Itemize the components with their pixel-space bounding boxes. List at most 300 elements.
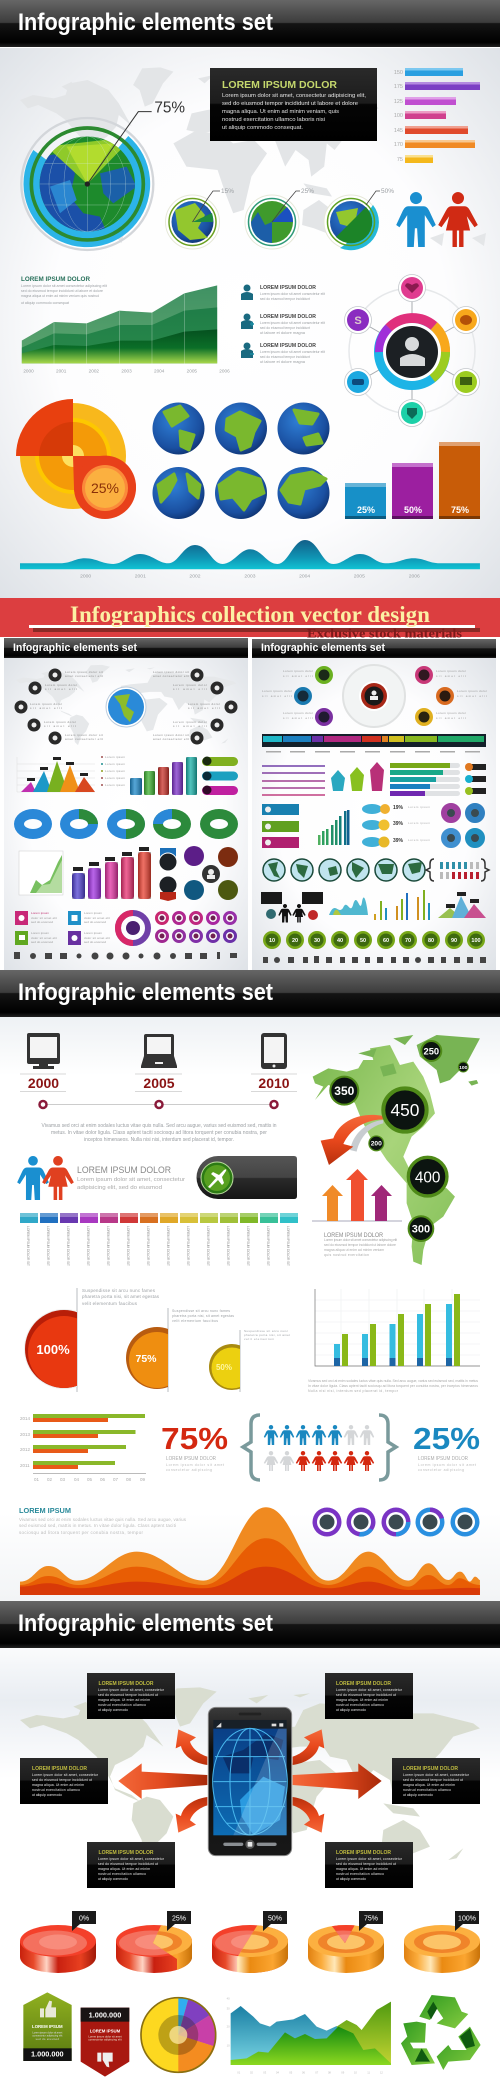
triangle chart bbox=[17, 755, 126, 792]
section 2 right mini panel bbox=[252, 639, 496, 970]
orange area chart bbox=[20, 1507, 480, 1595]
people icons bbox=[396, 192, 486, 247]
info box top left: sed do eiusmod tempor incididunt ut bbox=[98, 1693, 158, 1697]
icon text list: Lorem ipsum dolor sit amet consectetur elit bbox=[260, 321, 325, 325]
info box top left: Lorem ipsum dolor sit amet, consectetur bbox=[98, 1688, 165, 1692]
map text block bbox=[324, 1233, 397, 1257]
cylinders chart bbox=[72, 847, 151, 899]
info box middle left: LOREM IPSUM DOLOR bbox=[32, 1766, 87, 1772]
mini world map with globe bbox=[14, 665, 238, 745]
colour strip with vertical labels: LOREM IPSUM DOLOR SIT bbox=[86, 1226, 90, 1267]
horizontal green orange chart: 2012 bbox=[20, 1447, 31, 1452]
info box middle left: magna aliqua. Ut enim ad minim bbox=[32, 1783, 84, 1787]
six arrows bbox=[118, 1729, 382, 1833]
black text box: magna aliqua. Ut enim ad minim veniam, quis bbox=[222, 109, 339, 115]
icon tile list: sed do eiusmod bbox=[31, 920, 53, 924]
green number badges: 50 bbox=[360, 938, 366, 944]
green Americas map with values: 400 bbox=[415, 1169, 440, 1186]
info box top right bbox=[325, 1673, 413, 1719]
info box middle left: Lorem ipsum dolor sit amet, consectetur bbox=[32, 1773, 99, 1777]
percentage bar columns: 50% bbox=[404, 505, 422, 515]
mini world map with globe: Lorem ipsum dolor bbox=[30, 702, 62, 706]
info box bottom left: Lorem ipsum dolor sit amet, consectetur bbox=[98, 1857, 165, 1861]
info box top left: magna aliqua. Ut enim ad minim bbox=[98, 1698, 150, 1702]
black text box: nostrud exercitation ullamco laboris nisi bbox=[222, 117, 325, 123]
mini world map with globe: Lorem ipsum dolor sit bbox=[65, 670, 103, 674]
timeline paragraph bbox=[42, 1123, 277, 1143]
half circle 50%: 50% bbox=[216, 1363, 232, 1372]
orange radial pie 25% bbox=[16, 399, 136, 519]
green Americas map with values bbox=[313, 1035, 480, 1265]
green Americas map with values: 200 bbox=[371, 1141, 382, 1148]
colour strip with vertical labels: LOREM IPSUM DOLOR SIT bbox=[106, 1226, 110, 1267]
house arrows bbox=[331, 762, 384, 791]
half circle 75%: 75% bbox=[135, 1353, 157, 1365]
ellipse stats: Lorem ipsum bbox=[408, 821, 430, 825]
braces with figure rows bbox=[243, 1415, 396, 1480]
horizontal green orange chart: 2013 bbox=[20, 1432, 31, 1437]
teal wave timeline: 2006 bbox=[409, 574, 420, 580]
half circle 75% bbox=[126, 1308, 234, 1392]
teal wave timeline: 2000 bbox=[80, 574, 91, 580]
thin gradient lines bbox=[262, 766, 325, 795]
ellipse stats: 39% bbox=[393, 838, 404, 844]
section 3 header bar bbox=[0, 970, 500, 1017]
mini world map with globe: sit amet elit bbox=[30, 706, 62, 710]
multicolor radial pie bbox=[141, 1998, 217, 2072]
hub diagram: Lorem ipsum dolor bbox=[457, 689, 487, 693]
lorem block: adipisicing elit, sed do eiusmod bbox=[77, 1185, 162, 1191]
hub diagram: sit amet elit bbox=[262, 694, 292, 698]
half circle 100%: pharetra porta nisi, sit amet egestas bbox=[82, 1294, 160, 1299]
teal wave timeline bbox=[20, 540, 480, 580]
section 1 panel background bbox=[0, 48, 500, 598]
icon strip right bbox=[263, 956, 486, 963]
lorem block: LOREM IPSUM DOLOR bbox=[77, 1165, 171, 1176]
mini world map with globe: amet consectetur elit bbox=[65, 674, 103, 678]
icon tile list: Lorem ipsum bbox=[31, 911, 50, 915]
world map backdrop bbox=[20, 67, 379, 243]
icon text list: Lorem ipsum dolor sit amet consectetur elit bbox=[260, 350, 325, 354]
colour strip with vertical labels: LOREM IPSUM DOLOR SIT bbox=[126, 1226, 130, 1267]
blue green area chart: 11 bbox=[367, 2070, 371, 2074]
blue green area chart: 12 bbox=[380, 2070, 383, 2074]
half circle 50%: velit elementum bbox=[244, 1337, 274, 1341]
hub diagram: Lorem ipsum dolor bbox=[436, 669, 466, 673]
coin 0% bbox=[20, 1911, 96, 1973]
half circle 75%: Suspendisse sit arcu nunc fames bbox=[172, 1309, 230, 1313]
half circle 50%: Suspendisse sit arcu nunc bbox=[244, 1329, 288, 1333]
blue green area chart: 06 bbox=[302, 2070, 305, 2074]
icon text list: LOREM IPSUM DOLOR bbox=[260, 343, 316, 349]
icon tile list: sed do eiusmod bbox=[84, 940, 106, 944]
icon text list: LOREM IPSUM DOLOR bbox=[260, 314, 316, 320]
left mini header: Infographic elements set bbox=[13, 642, 137, 654]
chart heading and text: Lorem ipsum dolor sit amet consectetur adipiscing elit bbox=[21, 284, 107, 288]
coin 50%: 50% bbox=[268, 1916, 282, 1922]
info box top left bbox=[87, 1673, 175, 1719]
lorem block: Lorem ipsum dolor sit amet, consectetur bbox=[77, 1177, 185, 1183]
timeline paragraph: metus. In vitae dolor ligula. Class aptent taciti sociosqu ad litora torquent per conubia nostra, per bbox=[51, 1130, 267, 1136]
green number badges: 40 bbox=[337, 938, 343, 944]
mini world map with globe: sit amet elit bbox=[188, 706, 220, 710]
world map bbox=[20, 1687, 480, 1863]
horizontal colour bar chart: 175 bbox=[394, 84, 403, 90]
colour strip with vertical labels: LOREM IPSUM DOLOR SIT bbox=[286, 1226, 290, 1267]
hub diagram bbox=[262, 665, 487, 727]
3D column bars and pills bbox=[130, 756, 238, 795]
chart heading and text: LOREM IPSUM DOLOR bbox=[21, 276, 90, 283]
small globe 50%: 50% bbox=[381, 188, 394, 195]
half circle 75%: pharetra porta nisi, sit amet egestas bbox=[172, 1314, 234, 1318]
teal wave timeline: 2001 bbox=[135, 574, 146, 580]
thumb badges and bubbles bbox=[159, 846, 238, 901]
25% stat: LOREM IPSUM DOLOR bbox=[418, 1456, 468, 1462]
stacked colour bar bbox=[262, 734, 486, 752]
green area chart: 2000 bbox=[23, 368, 34, 373]
green area chart: 2004 bbox=[154, 368, 165, 373]
icon tile list: sed do eiusmod bbox=[84, 920, 106, 924]
small globe 15%: 15% bbox=[221, 188, 234, 195]
horizontal colour bar chart: 125 bbox=[394, 99, 403, 105]
section 1 header bar: Infographic elements set bbox=[18, 9, 273, 36]
icon tile list: dolor sit amet elit bbox=[84, 936, 110, 940]
info box top right: nostrud exercitation ullamco bbox=[336, 1703, 384, 1707]
black text box: sed do eiusmod tempor incididunt ut labore et dolore bbox=[222, 101, 358, 107]
black text box: Lorem ipsum dolor sit amet, consectetur adipisicing elit, bbox=[222, 93, 366, 99]
half circle 50%: pharetra porta nisi, sit amet bbox=[244, 1333, 290, 1337]
coin 25% bbox=[116, 1911, 192, 1973]
mini world map with globe: amet consectetur elit bbox=[65, 737, 103, 741]
red thumbs down badge: consectetur adipiscing elit bbox=[88, 2038, 122, 2042]
large radar globe 75% bbox=[21, 100, 185, 250]
mini world map with globe: Lorem ipsum dolor sit bbox=[65, 733, 103, 737]
blue green area chart: 20 bbox=[227, 2025, 230, 2029]
black text box: LOREM IPSUM DOLOR bbox=[222, 79, 337, 91]
three banners bbox=[262, 804, 299, 848]
device timeline: 2000 bbox=[28, 1075, 59, 1091]
green Americas map with values: 100 bbox=[459, 1065, 468, 1071]
info box middle right: LOREM IPSUM DOLOR bbox=[403, 1766, 458, 1772]
info box middle right bbox=[392, 1758, 480, 1804]
coin 75%: 75% bbox=[364, 1916, 378, 1922]
icon text list: LOREM IPSUM DOLOR bbox=[260, 285, 316, 291]
section 4: phone diagram bbox=[0, 1601, 500, 2084]
map text block: Lorem ipsum dolor sit amet consectetur adipiscing elit bbox=[324, 1238, 397, 1242]
colour strip with vertical labels bbox=[20, 1213, 298, 1267]
small globe 50% bbox=[324, 188, 394, 250]
progress rings row bbox=[312, 1507, 480, 1537]
timeline paragraph: inceptos himenaeos. Nulla nisi nisi, interdum sed placerat id, tempor. bbox=[84, 1137, 234, 1143]
colour strip with vertical labels: LOREM IPSUM DOLOR SIT bbox=[226, 1226, 230, 1267]
chart heading and text bbox=[21, 276, 107, 305]
icon tile list: Lorem ipsum bbox=[31, 931, 50, 935]
icon text list: Lorem ipsum dolor sit amet consectetur elit bbox=[260, 292, 325, 296]
mini world map with globe: sit amet elit bbox=[45, 687, 77, 691]
teal wave timeline: 2003 bbox=[244, 574, 256, 580]
couple icon bbox=[17, 1156, 74, 1200]
blue green area chart: 02 bbox=[250, 2070, 253, 2074]
section 2: red banner bbox=[0, 598, 500, 637]
teal wave timeline: 2002 bbox=[189, 574, 201, 580]
mini world map with globe: Lorem ipsum dolor sit bbox=[153, 733, 189, 737]
left mini header bbox=[4, 638, 248, 658]
info box middle left bbox=[20, 1758, 108, 1804]
25% stat: Lorem ipsum dolor sit amet bbox=[418, 1463, 476, 1467]
horizontal green orange chart: 09 bbox=[140, 1477, 146, 1482]
green number badges: 10 bbox=[269, 938, 275, 944]
triangle chart: Lorem ipsum bbox=[105, 783, 126, 787]
colour strip with vertical labels: LOREM IPSUM DOLOR SIT bbox=[46, 1226, 50, 1267]
horizontal colour bar chart bbox=[394, 68, 480, 163]
green area chart: 2006 bbox=[219, 368, 230, 373]
lorem ipsum heading bbox=[19, 1506, 187, 1535]
callouts with people bbox=[261, 892, 323, 922]
percentage bar columns bbox=[345, 442, 480, 519]
icon tile list: dolor sit amet elit bbox=[31, 916, 57, 920]
icon tile list: Lorem ipsum bbox=[84, 931, 102, 935]
blue green area chart: 01 bbox=[237, 2070, 241, 2074]
hub diagram: Lorem ipsum dolor bbox=[283, 711, 313, 715]
lorem ipsum heading: Vivamus sed orci at enim sodales luctus vitae quis nulla. Sed arcu augue, varius bbox=[19, 1517, 187, 1522]
half circle 100%: 100% bbox=[36, 1342, 70, 1357]
info box middle left: ut aliquip commodo bbox=[32, 1793, 62, 1797]
info box middle right: magna aliqua. Ut enim ad minim bbox=[403, 1783, 455, 1787]
icon tile list: Lorem ipsum bbox=[84, 911, 102, 915]
blue green area chart: 05 bbox=[289, 2070, 293, 2074]
section 4 header bar bbox=[0, 1601, 500, 1648]
green area chart: 2005 bbox=[187, 368, 197, 373]
ellipse stats: 39% bbox=[393, 821, 404, 827]
ellipse stats: 19% bbox=[393, 805, 404, 811]
green area chart: 2003 bbox=[121, 368, 132, 373]
green number badges: 90 bbox=[451, 938, 457, 944]
triangle chart: Lorem ipsum bbox=[105, 755, 126, 759]
icon text list: ut labore et dolore magna bbox=[260, 331, 305, 335]
green bars chart bbox=[318, 810, 350, 845]
info box bottom right: nostrud exercitation ullamco bbox=[336, 1872, 384, 1876]
small green area chart bbox=[19, 851, 63, 895]
info box top right: LOREM IPSUM DOLOR bbox=[336, 1681, 391, 1687]
colour strip with vertical labels: LOREM IPSUM DOLOR SIT bbox=[166, 1226, 170, 1267]
green Americas map with values: 300 bbox=[412, 1224, 430, 1236]
info box bottom left bbox=[87, 1842, 175, 1888]
small globe 15% bbox=[166, 188, 234, 249]
25% stat: consectetur adipiscing bbox=[418, 1468, 464, 1472]
bell area chart bbox=[329, 898, 368, 915]
red thumbs down badge: 1.000.000 bbox=[89, 2011, 121, 2020]
right mini header bbox=[252, 639, 496, 658]
teal wave timeline: 2004 bbox=[299, 574, 310, 580]
horizontal green orange chart: 01 bbox=[34, 1477, 40, 1482]
colour strip with vertical labels: LOREM IPSUM DOLOR SIT bbox=[246, 1226, 250, 1267]
horizontal green orange chart: 03 bbox=[60, 1477, 66, 1482]
hub diagram: Lorem ipsum dolor bbox=[436, 711, 466, 715]
icon text list: sed do eiusmod tempor incididunt bbox=[260, 355, 310, 359]
radial person diagram bbox=[344, 274, 480, 426]
mini world map with globe: sit amet elit bbox=[44, 724, 76, 728]
colour strip with vertical labels: LOREM IPSUM DOLOR SIT bbox=[146, 1226, 150, 1267]
green number badges: 100 bbox=[471, 938, 481, 944]
mini world map with globe: Lorem ipsum dolor bbox=[188, 702, 220, 706]
chart heading and text: sed do eiusmod tempor incididunt ut labore et dolore bbox=[21, 289, 103, 293]
brace with figures bbox=[426, 859, 489, 881]
lorem ipsum heading: LOREM IPSUM bbox=[19, 1506, 71, 1515]
mini world map with globe: Lorem ipsum dolor bbox=[45, 683, 77, 687]
hub diagram: sit amet elit bbox=[436, 674, 466, 678]
five 3D donuts bbox=[14, 809, 238, 839]
info box top left: LOREM IPSUM DOLOR bbox=[98, 1681, 154, 1687]
red thumbs down badge: LOREM IPSUM bbox=[90, 2029, 121, 2034]
horizontal green orange chart: 05 bbox=[87, 1477, 93, 1482]
colour strip with vertical labels: LOREM IPSUM DOLOR SIT bbox=[186, 1226, 190, 1267]
ellipse stats: Lorem ipsum bbox=[408, 838, 430, 842]
green number badges bbox=[263, 931, 485, 949]
map text block: magna aliqua ut enim ad minim veniam bbox=[324, 1248, 384, 1252]
device timeline: 2005 bbox=[143, 1075, 175, 1091]
horizontal colour bar chart: 145 bbox=[394, 128, 403, 134]
blue green area chart: 07 bbox=[315, 2070, 319, 2074]
large radar globe 75%: 75% bbox=[154, 100, 185, 117]
green thumbs up badge: 1.000.000 bbox=[31, 2050, 64, 2059]
chart heading and text: ut aliquip commodo consequat bbox=[21, 301, 69, 305]
section 3 header bar: Infographic elements set bbox=[18, 979, 273, 1006]
orange radial pie 25%: 25% bbox=[91, 480, 119, 496]
mini world map with globe: Lorem ipsum dolor bbox=[173, 720, 207, 724]
triangle chart: Lorem ipsum bbox=[105, 769, 126, 773]
plane button bbox=[196, 1156, 297, 1199]
info box bottom right: Lorem ipsum dolor sit amet, consectetur bbox=[336, 1857, 403, 1861]
hub diagram: sit amet elit bbox=[436, 716, 466, 720]
75% stat: consectetur adipiscing bbox=[166, 1468, 212, 1472]
green thumbs up badge: consectetur adipiscing elit bbox=[32, 2034, 63, 2038]
info box top right: sed do eiusmod tempor incididunt ut bbox=[336, 1693, 396, 1697]
map text block: sed do eiusmod tempor incididunt ut labore dolore bbox=[324, 1243, 396, 1247]
mini world map with globe: Lorem ipsum dolor bbox=[173, 683, 207, 687]
icon tile list: sed do eiusmod bbox=[31, 940, 53, 944]
horizontal green orange chart: 07 bbox=[113, 1477, 119, 1482]
half circle 75%: velit elementum faucibus bbox=[172, 1319, 218, 1323]
section 4 header bar: Infographic elements set bbox=[18, 1610, 273, 1637]
icon tile list bbox=[15, 911, 110, 945]
blue green area chart: 04 bbox=[276, 2070, 279, 2074]
ellipse stats bbox=[362, 804, 430, 848]
black text box bbox=[210, 68, 377, 141]
section 2 left mini panel bbox=[4, 638, 248, 970]
coin 0%: 0% bbox=[79, 1916, 89, 1922]
triangle chart: Lorem ipsum bbox=[105, 776, 126, 780]
chart heading and text: magna aliqua ut enim ad minim veniam quis nostrud bbox=[21, 294, 99, 298]
ellipse stats: Lorem ipsum bbox=[408, 805, 430, 809]
info box bottom left: LOREM IPSUM DOLOR bbox=[98, 1850, 154, 1856]
green number badges: 60 bbox=[383, 938, 389, 944]
section 1 header bar bbox=[0, 0, 500, 47]
up arrows chart bbox=[312, 1169, 402, 1221]
timeline paragraph: Vivamus sed orci at enim sodales luctus vitae quis nulla. Sed arcu augue, varius sed euismod sed, mattis in bbox=[42, 1123, 277, 1129]
grouped column chart: Vivamus sed orci at enim sodales luctus vitae quis nulla. Sed arcu augue, varius sed euismod sed, mattis in metus bbox=[308, 1379, 478, 1383]
colour strip with vertical labels: LOREM IPSUM DOLOR SIT bbox=[26, 1226, 30, 1267]
75% stat bbox=[161, 1421, 228, 1472]
blue green area chart bbox=[227, 1996, 391, 2074]
section 3: timeline and map bbox=[0, 970, 500, 1601]
coin 75% bbox=[308, 1911, 384, 1973]
icon text list: sed do eiusmod tempor incididunt bbox=[260, 326, 310, 330]
hub diagram: Lorem ipsum dolor bbox=[283, 669, 313, 673]
blue green area chart: 10 bbox=[354, 2070, 357, 2074]
smartphone bbox=[208, 1707, 292, 1856]
blue green area chart: 08 bbox=[328, 2070, 331, 2074]
black text box: ut aliquip commodo consequat. bbox=[222, 125, 303, 131]
small globe 25%: 25% bbox=[301, 188, 314, 195]
75% stat: LOREM IPSUM DOLOR bbox=[166, 1456, 216, 1462]
horizontal green orange chart: 06 bbox=[100, 1477, 106, 1482]
horizontal colour bar chart: 170 bbox=[394, 142, 403, 148]
info box middle left: sed do eiusmod tempor incididunt ut bbox=[32, 1778, 92, 1782]
six earth globes bbox=[152, 402, 330, 519]
icon text list bbox=[241, 284, 325, 364]
info box bottom left: sed do eiusmod tempor incididunt ut bbox=[98, 1862, 158, 1866]
icon text list: sed do eiusmod tempor incididunt bbox=[260, 297, 310, 301]
info box middle right: sed do eiusmod tempor incididunt ut bbox=[403, 1778, 463, 1782]
green Americas map with values: 250 bbox=[424, 1046, 439, 1056]
info box bottom right: sed do eiusmod tempor incididunt ut bbox=[336, 1862, 396, 1866]
green number badges: 70 bbox=[405, 938, 411, 944]
triangle chart: Lorem ipsum bbox=[105, 762, 126, 766]
horizontal green orange chart: 02 bbox=[47, 1477, 53, 1482]
horizontal green orange chart: 2014 bbox=[20, 1416, 31, 1421]
25% stat bbox=[413, 1421, 480, 1472]
mini world map with globe: amet consectetur elit bbox=[153, 737, 189, 741]
info box bottom right: LOREM IPSUM DOLOR bbox=[336, 1850, 391, 1856]
75% stat: Lorem ipsum dolor sit amet bbox=[166, 1463, 224, 1467]
horizontal green orange chart bbox=[20, 1414, 146, 1482]
horizontal colour bar chart: 150 bbox=[394, 70, 403, 76]
big ring and small ring grid bbox=[118, 912, 236, 943]
half circle 50% bbox=[209, 1329, 290, 1392]
info box bottom left: nostrud exercitation ullamco bbox=[98, 1872, 146, 1876]
info box top right: Lorem ipsum dolor sit amet, consectetur bbox=[336, 1688, 403, 1692]
lorem ipsum heading: sed euismod sed, mattis in metus. In vitae dolor ligula. Class aptent taciti bbox=[19, 1523, 176, 1528]
hub diagram: sit amet elit bbox=[283, 716, 313, 720]
green number badges: 80 bbox=[428, 938, 434, 944]
blue green area chart: 03 bbox=[263, 2070, 267, 2074]
callout arrow shadow bbox=[350, 1120, 383, 1152]
triangle peaks bbox=[438, 892, 486, 918]
recycle symbol bbox=[401, 1995, 481, 2070]
horizontal green orange chart: 2011 bbox=[20, 1463, 30, 1468]
horizontal colour bar chart: 75 bbox=[397, 157, 403, 163]
progress bars and pills bbox=[390, 763, 486, 796]
mini world map with globe: Lorem ipsum dolor sit bbox=[153, 670, 189, 674]
banner title: Infographics collection vector design bbox=[70, 602, 430, 627]
half circle 100% bbox=[24, 1288, 160, 1392]
info box bottom left: ut aliquip commodo bbox=[98, 1877, 128, 1881]
green Americas map with values: 350 bbox=[334, 1084, 355, 1098]
colour strip with vertical labels: LOREM IPSUM DOLOR SIT bbox=[266, 1226, 270, 1267]
info box top left: ut aliquip commodo bbox=[98, 1708, 128, 1712]
map text block: LOREM IPSUM DOLOR bbox=[324, 1233, 384, 1239]
grouped column chart bbox=[308, 1289, 480, 1393]
blue green area chart: 09 bbox=[341, 2070, 345, 2074]
map text block: quis nostrud exercitation bbox=[324, 1253, 369, 1257]
green area chart: 2001 bbox=[56, 368, 67, 373]
percentage bar columns: 25% bbox=[357, 505, 375, 515]
hub diagram: sit amet elit bbox=[283, 674, 313, 678]
red thumbs down badge bbox=[81, 2008, 129, 2077]
section 1: globes and charts bbox=[0, 0, 500, 598]
green area chart: 2002 bbox=[89, 368, 99, 373]
green area chart bbox=[22, 285, 230, 373]
